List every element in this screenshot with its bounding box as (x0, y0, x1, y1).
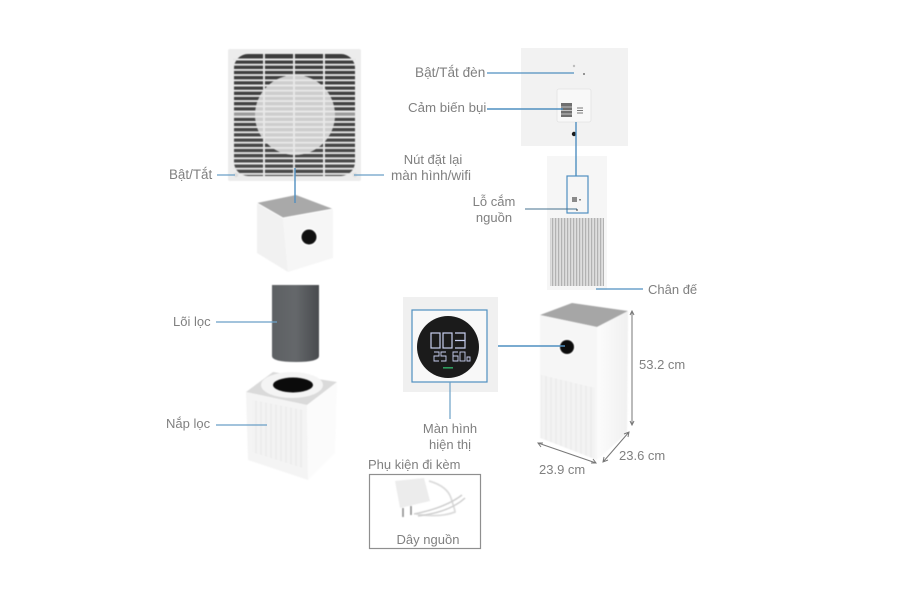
panel: accessory power cable (370, 474, 480, 548)
label: Bật/Tắt: Bật/Tắt (169, 167, 212, 182)
dimension arrow: depth: 23.6 cm (619, 448, 665, 463)
label: Lỗ cắm nguồn (473, 194, 577, 225)
label: Bật/Tắt (169, 167, 235, 182)
label: Màn hình hiện thị (423, 382, 477, 452)
panel: filter cover (246, 372, 337, 480)
icon: filter core (272, 285, 319, 362)
label: Nút đặt lại màn hình/wifi: màn hình/wifi (391, 168, 471, 183)
heading: Phụ kiện đi kèm: Phụ kiện đi kèm (368, 457, 460, 472)
label: Màn hình hiện thị: hiện thị (429, 437, 471, 452)
panel: purifier with dimensions (540, 303, 628, 460)
panel: top cube with display hole (257, 195, 333, 272)
label: Nắp lọc (166, 416, 267, 431)
connector: display to purifier (498, 345, 565, 347)
label: Cảm biến bụi: Cảm biến bụi (408, 100, 486, 115)
label: Nắp lọc: Nắp lọc (166, 416, 211, 431)
label: Bật/Tắt đèn: Bật/Tắt đèn (415, 65, 485, 80)
dimension arrow: height (630, 311, 685, 425)
label: Lõi lọc (173, 314, 277, 329)
label: Nút đặt lại màn hình/wifi (354, 152, 471, 183)
panel: rear body view (547, 156, 607, 290)
panel: accessory power cable: Dây nguồn (397, 532, 459, 547)
dimension arrow: height: 53.2 cm (639, 357, 685, 372)
label: Chân đế (596, 282, 698, 297)
label: Màn hình hiện thị: Màn hình (423, 421, 477, 436)
dimension arrow: width (538, 443, 596, 477)
label: Lỗ cắm nguồn: Lỗ cắm (473, 194, 515, 209)
panel: fan rear view (228, 49, 361, 181)
label: Lỗ cắm nguồn: nguồn (476, 210, 512, 225)
label: Lõi lọc: Lõi lọc (173, 314, 211, 329)
dimension arrow: depth (603, 432, 665, 463)
label: Chân đế: Chân đế (648, 282, 698, 297)
dimension arrow: width: 23.9 cm (539, 462, 585, 477)
label: Nút đặt lại màn hình/wifi: Nút đặt lại (404, 152, 462, 167)
panel: display close-up (403, 297, 498, 392)
connector: top view to rear body (575, 122, 577, 176)
panel: top-down control view (521, 48, 628, 146)
connector: fan to cube (294, 168, 296, 203)
